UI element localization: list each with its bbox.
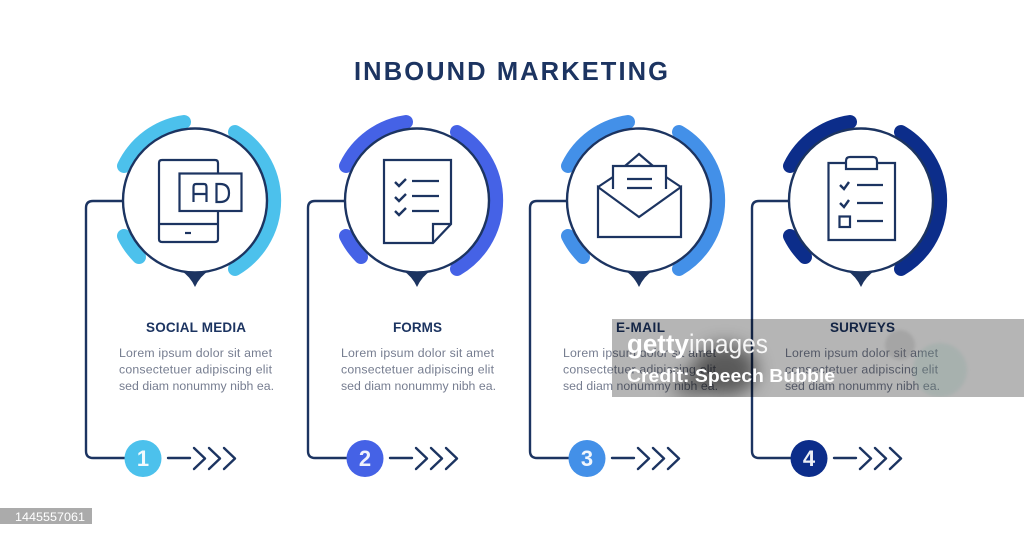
text block 3: Lorem ipsum dolor sit amet	[563, 346, 717, 360]
watermark band	[612, 319, 1024, 399]
text block 1: sed diam nonummy nibh ea.	[119, 379, 274, 393]
heading 2: FORMS	[393, 320, 442, 335]
watermark logo: images	[689, 329, 768, 359]
arrow 3	[612, 448, 679, 469]
text block 2: sed diam nonummy nibh ea.	[341, 379, 496, 393]
title: INBOUND MARKETING	[354, 58, 668, 86]
heading 3: E-MAIL	[616, 320, 665, 335]
pointer 2	[402, 270, 432, 287]
text block 4: Lorem ipsum dolor sit amet	[785, 346, 939, 360]
panel: social media	[86, 122, 274, 477]
heading 1: SOCIAL MEDIA	[146, 320, 246, 335]
connector line 1	[86, 201, 125, 458]
text block 3	[563, 346, 718, 393]
icon: open envelope	[598, 154, 681, 237]
circle 1	[123, 128, 267, 272]
icon: clipboard checklist	[828, 157, 895, 240]
number badge 1	[124, 440, 162, 477]
text block 2: Lorem ipsum dolor sit amet	[341, 346, 495, 360]
connector line 3	[530, 201, 569, 458]
circle 3	[567, 128, 711, 272]
text block 4	[785, 346, 940, 393]
watermark logo	[627, 329, 768, 359]
icon: tablet with ad	[159, 160, 242, 242]
text block 2	[341, 346, 496, 393]
ring arcs 3	[568, 122, 718, 269]
number badge 4	[790, 440, 828, 477]
panel: forms	[308, 122, 496, 477]
text block 1	[119, 346, 274, 393]
ring arcs 2	[346, 122, 496, 269]
arrow 1	[168, 448, 235, 469]
text block 3: consectetuer adipiscing elit	[563, 362, 717, 376]
text block 4: sed diam nonummy nibh ea.	[785, 379, 940, 393]
image id tag	[0, 508, 92, 524]
number badge 2	[346, 440, 384, 477]
circle 2	[345, 128, 489, 272]
number badge 3	[568, 440, 606, 477]
text block 1: consectetuer adipiscing elit	[119, 362, 273, 376]
arrow 4	[834, 448, 901, 469]
ring arcs 4	[790, 122, 940, 269]
connector line 2	[308, 201, 347, 458]
number badge 1: 1	[137, 446, 149, 471]
text block 4: consectetuer adipiscing elit	[785, 362, 939, 376]
number badge 4: 4	[803, 446, 816, 471]
text block 1: Lorem ipsum dolor sit amet	[119, 346, 273, 360]
pointer 1	[180, 270, 210, 287]
circle 4	[789, 128, 933, 272]
watermark logo: getty	[627, 329, 689, 359]
number badge 3: 3	[581, 446, 593, 471]
pointer 3	[624, 270, 654, 287]
text block 3: sed diam nonummy nibh ea.	[563, 379, 718, 393]
panel: e-mail	[530, 122, 718, 477]
heading 4: SURVEYS	[830, 320, 895, 335]
panel: surveys	[752, 122, 940, 477]
text block 2: consectetuer adipiscing elit	[341, 362, 495, 376]
arrow 2	[390, 448, 457, 469]
ring arcs 1	[124, 122, 274, 269]
number badge 2: 2	[359, 446, 371, 471]
watermark credit: Credit: Speech Bubble	[627, 365, 835, 386]
icon: form document	[384, 160, 451, 243]
image id tag: 1445557061	[15, 512, 85, 524]
connector line 4	[752, 201, 791, 458]
pointer 4	[846, 270, 876, 287]
